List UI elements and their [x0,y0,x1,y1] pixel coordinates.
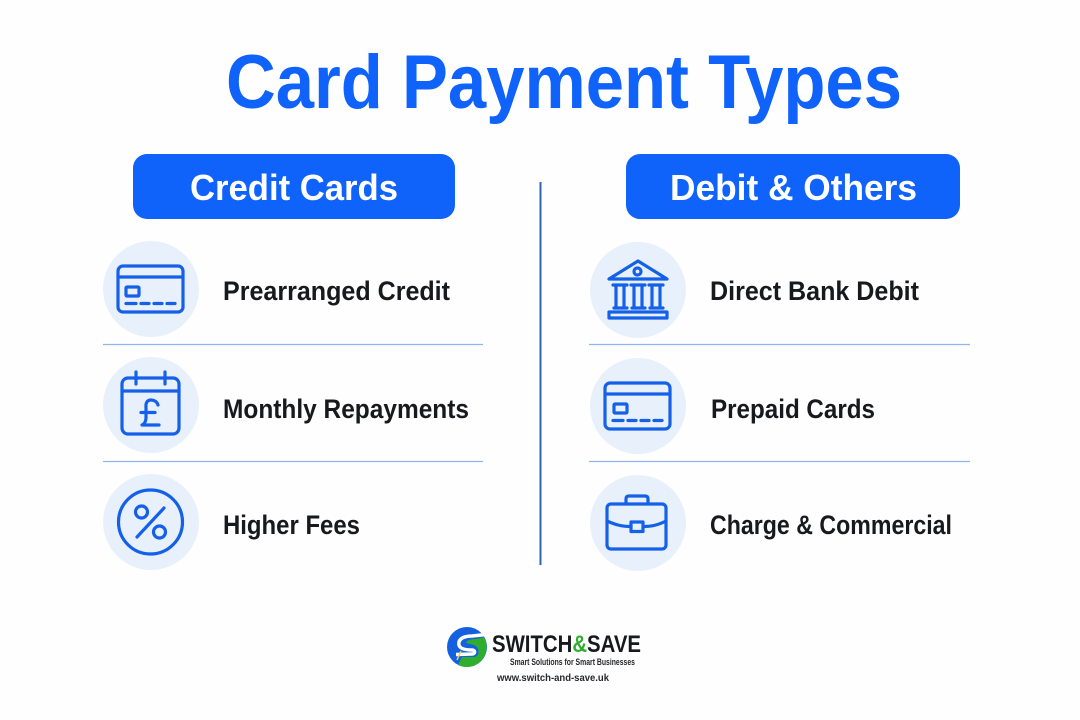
row: higher fees [103,474,360,570]
icon: logo mark [447,627,487,667]
icon: credit card [605,383,670,429]
heading: credit cards: Credit Cards [190,167,398,208]
row: charge and commercial: Charge & Commercial [710,510,952,540]
icon: briefcase [607,496,666,549]
logo wordmark: SWITCH&SAVE [492,631,641,658]
row: charge and commercial [590,475,952,571]
panel: credit cards [103,154,483,570]
row: direct bank debit: Direct Bank Debit [710,276,919,306]
row: prearranged credit: Prearranged Credit [223,276,450,306]
website: www.switch-and-save.uk [496,673,609,684]
row: monthly repayments [103,357,469,453]
row: direct bank debit [590,242,919,338]
row: prepaid cards [590,358,875,454]
logo: Switch and Save [447,627,641,684]
heading: credit cards [133,154,455,219]
icon: credit card [118,266,183,312]
icon: calendar with pound [122,372,179,434]
row: higher fees: Higher Fees [223,510,360,540]
icon: percent [118,490,182,554]
panel: debit and others [589,154,970,571]
row: prepaid cards: Prepaid Cards [711,394,875,424]
row: prearranged credit [103,241,450,337]
heading: debit and others [626,154,960,219]
title: Card Payment Types [226,40,902,125]
icon: bank [609,261,667,318]
heading: debit and others: Debit & Others [670,167,917,208]
tagline: Smart Solutions for Smart Businesses [510,657,635,667]
row: monthly repayments: Monthly Repayments [223,394,469,424]
